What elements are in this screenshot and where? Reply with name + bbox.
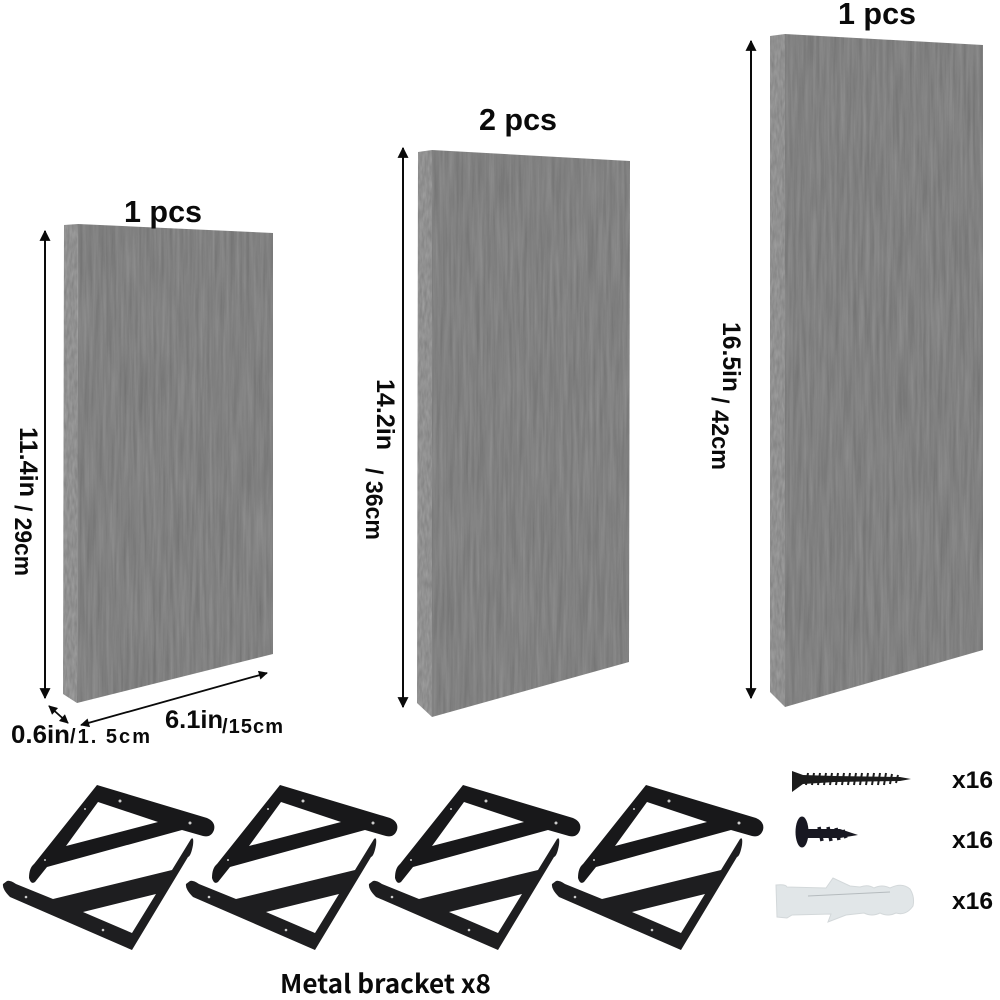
label: large board height: 16.5in [717,322,745,392]
label: small board height: 11.4in [14,427,42,497]
label: round head screw count: x16 [952,827,993,854]
label: board width [165,706,283,738]
label: board depth [11,721,150,749]
panel: large shelf board [770,34,983,707]
arrow: large board height [750,41,752,698]
icon: plastic wall anchor [776,878,914,922]
panel: medium shelf board [417,150,630,717]
label: large board height: / 42cm [706,397,733,470]
icon: metal bracket pair 4 [552,785,763,950]
heading: small board quantity: 1 pcs [124,195,202,229]
label: countersunk screw count: x16 [952,767,993,794]
panel: small shelf board [63,224,274,704]
label: medium board height: 14.2in [371,379,399,450]
icon: round head screw [796,816,858,848]
label: medium board height [360,379,399,540]
label: board depth: /1. 5cm [70,726,150,748]
icon: metal bracket pair 3 [369,785,580,950]
label: wall anchor count: x16 [952,888,993,915]
arrow: medium board height [402,148,404,707]
label: medium board height: / 36cm [360,468,387,540]
icon: countersunk screw [792,771,911,792]
label: board width: 6.1in [165,706,223,734]
label: board width: /15cm [222,716,283,738]
label: small board height: / 29cm [9,505,36,576]
label: metal bracket count: Metal bracket x8 [280,964,491,1000]
label: board depth: 0.6in [11,721,70,749]
icon: metal bracket pair 1 [3,785,214,950]
label: large board height [706,322,745,470]
label: small board height [9,427,42,576]
icon: metal bracket pair 2 [186,785,397,950]
arrow: board depth [49,706,68,723]
arrow: small board height [44,231,46,698]
arrow: board width [81,673,267,725]
heading: medium board quantity: 2 pcs [479,103,557,137]
